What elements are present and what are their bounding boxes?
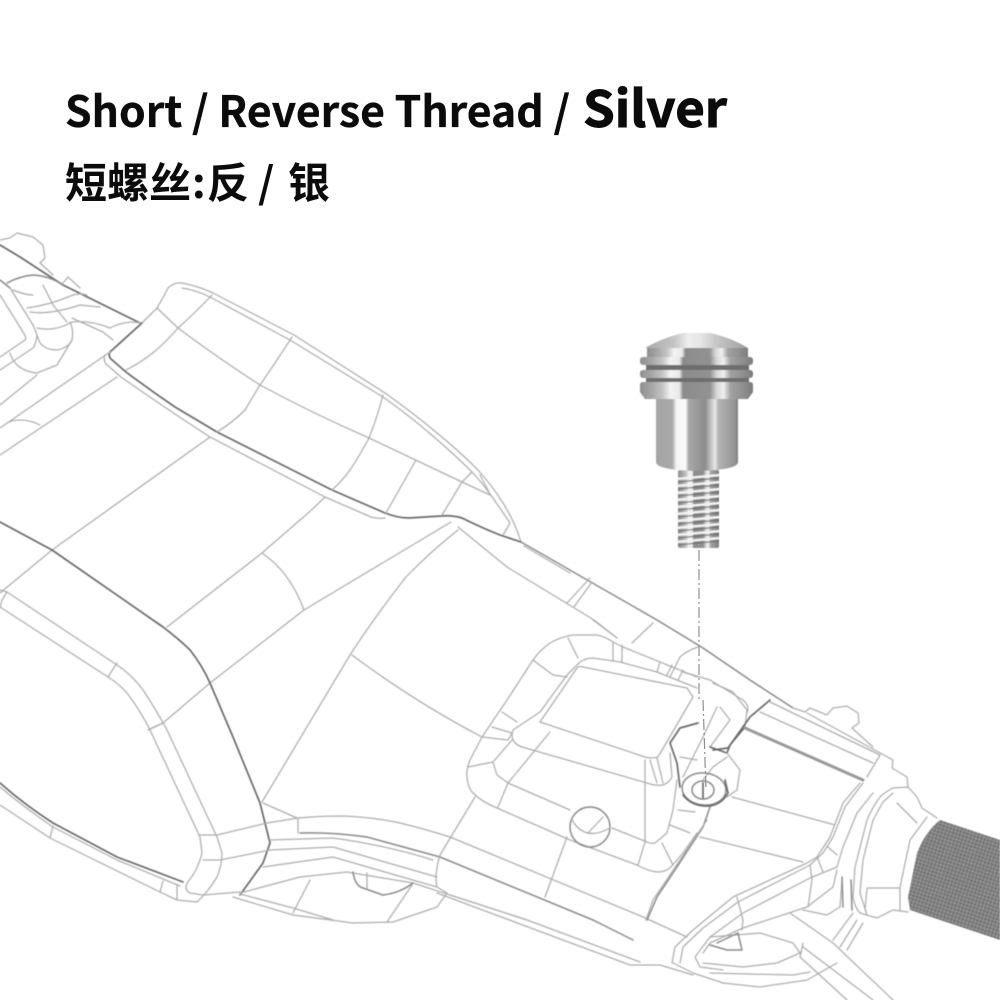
lever bracket [672,783,873,970]
dash-dot axis line [699,550,706,790]
title: English heading: Short / Reverse Thread / [65,78,570,140]
screw fins [640,348,753,399]
frame rails [233,797,693,975]
seat top piece [104,283,793,708]
switch housing [450,620,748,920]
subtitle: Chinese heading: 反 [207,150,249,211]
screw thread [676,470,720,548]
left tank band [0,590,298,902]
rubber plug [570,807,610,847]
collar and grip hub [853,787,937,918]
subtitle: Chinese heading: : [192,150,206,211]
screw dome [645,333,748,348]
subtitle: Chinese heading: 银 [288,150,330,211]
screw shank [656,396,738,471]
knurled grip [908,820,1000,940]
title: English heading: Silver [583,70,727,142]
top left bracket and fairing [0,233,140,455]
screw: silver bolt [640,333,753,548]
line drawing: motorcycle top view [0,233,1000,1000]
bolt hole [680,771,728,807]
subtitle: Chinese heading: 短螺丝 [65,150,191,211]
subtitle: Chinese heading: / [258,150,274,211]
hatched rail [745,728,863,780]
seat body lines [0,437,617,895]
right controls [672,700,1000,1000]
